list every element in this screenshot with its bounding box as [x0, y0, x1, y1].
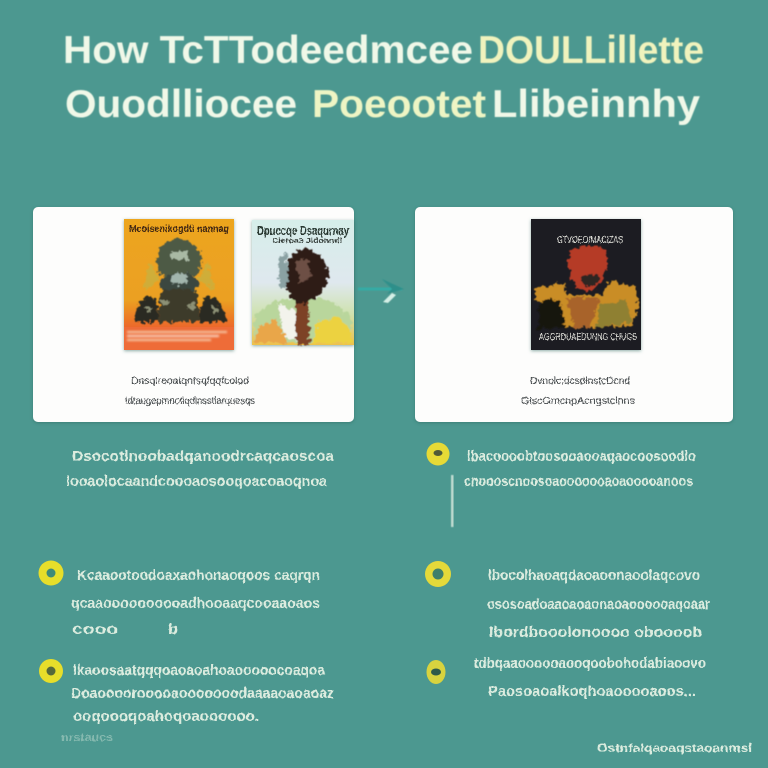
- caption: [125, 376, 255, 407]
- faint footnote: left: nrstaucs: [61, 732, 113, 744]
- text block: right middle: lbocolhaoaqdaoaoonaoolaqcovo: [488, 567, 700, 584]
- panel: right card: [415, 207, 733, 422]
- text block: right intro: cnoooscnoosoaooooooaoaooooanoos: [464, 473, 693, 490]
- caption: Dnsqlreoatqnfsqfqqfcolod: [131, 376, 249, 387]
- book cover: illustrated: Cleroa3 Jldonndl: [272, 238, 342, 245]
- book cover: illustrated: [252, 220, 354, 345]
- book cover: dark: [531, 219, 641, 350]
- text block: left bottom: ooqoooqoahoqoaoooooo.: [73, 708, 259, 725]
- text block: right middle: ososoadoaaoaoaonaoaoooooaqoaar: [487, 596, 710, 613]
- text block: left middle: cooo: [72, 621, 118, 638]
- text block: left bottom: Doaoooorooooaooooooodaaaaoaoaoaz: [71, 685, 334, 702]
- bullet icon: right bottom: [426, 660, 446, 684]
- text block: left intro: Dsocotlnoobadqanoodrcaqcaoscoa: [72, 448, 335, 465]
- text block: left middle: qcaaoooooooooadhooaaqcooaaoaos: [71, 595, 320, 612]
- caption: tdtaugepmnotiqdlnsstlarquesqs: [125, 396, 255, 407]
- caption: [521, 376, 635, 407]
- text block: left middle: [71, 567, 320, 638]
- text block: left middle: b: [168, 621, 178, 638]
- title: [63, 29, 704, 126]
- text block: right bottom: tdbqaaoooooaooqoobohodabiaoovo: [474, 655, 706, 672]
- panel: left card: [33, 207, 354, 422]
- text block: right bottom: [474, 655, 706, 700]
- caption: Dvnolc:dcsdlnstcDcnd: [530, 376, 630, 387]
- bullet icon: right intro: [426, 442, 450, 466]
- book cover: dark: AGGRDUAEDUNNG CHUGS: [539, 332, 637, 343]
- text block: right intro: lbacoooobtoosooaooaqaocoosoodlo: [467, 448, 696, 465]
- text block: left intro: looaolocaandcoooaosooqoacoaoqnoa: [66, 473, 328, 490]
- bullet icon: right middle: [425, 561, 451, 587]
- footnote: right: Ostnfalqaoaqstaoanmsl: [597, 741, 752, 755]
- title: Poeootet: [312, 83, 486, 126]
- text block: left middle: Kcaaootoodoaxaohonaoqoos caqrqn: [77, 567, 320, 584]
- book title text: GTVOEOIMACIZAS: [557, 235, 623, 246]
- title: DOULLillette: [478, 29, 704, 72]
- text block: right middle: [487, 567, 710, 641]
- book title text: Dpuccqe Dsaqurnay: [257, 223, 350, 238]
- text block: right middle: Ibordbooolonoooo oboooob: [489, 624, 702, 641]
- text block: left bottom: [71, 662, 334, 725]
- book title text: Mcoisenikogdti nannag: [129, 224, 229, 235]
- caption: GlscGmcnpAcngstclnns: [521, 396, 635, 407]
- arrow: [358, 279, 404, 303]
- text block: right intro: [464, 448, 696, 490]
- title: How TcTTodeedmcee: [63, 29, 473, 72]
- text block: left bottom: lkaoosaatqqqoaoaoahoaooooocoaqoa: [73, 662, 326, 679]
- bullet icon: left middle: [38, 560, 64, 586]
- title: Ouodlliocee: [65, 83, 297, 126]
- connector line: [451, 475, 454, 527]
- text block: right bottom: Paosoaoalkoqhoaooooaoos...: [488, 683, 696, 700]
- text block: left intro: [66, 448, 335, 490]
- bullet icon: left bottom: [39, 659, 63, 683]
- title: Llibeinnhy: [492, 83, 700, 126]
- book cover: orange: [124, 219, 234, 350]
